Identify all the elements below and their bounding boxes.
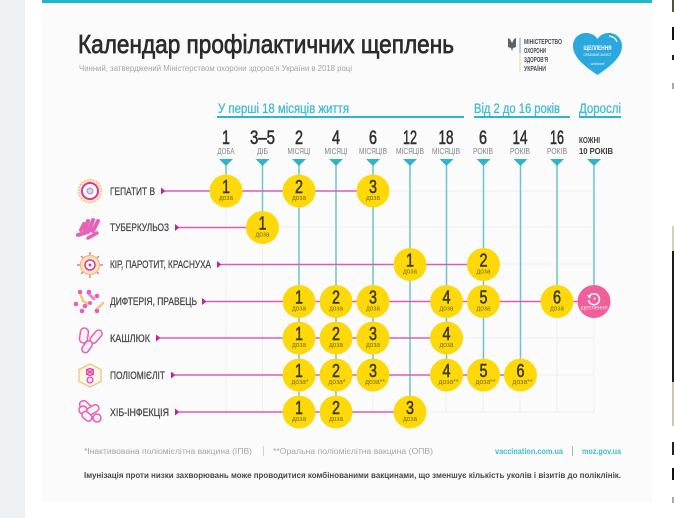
website links: vaccination.com.ua xyxy=(495,446,563,456)
icon: Hib bacteria xyxy=(78,399,101,423)
row: hepatitis B xyxy=(78,174,390,208)
row: hepatitis B: доза xyxy=(366,193,381,202)
row: diphtheria, tetanus: доза xyxy=(329,304,344,312)
icon: polio virus xyxy=(79,364,101,387)
booster badge: adults every 10 years: щеплення xyxy=(580,304,608,312)
logo: vaccination heart: unicef xyxy=(590,62,605,66)
row: diphtheria, tetanus: 3 xyxy=(369,288,377,308)
column headers: РОКІВ xyxy=(547,147,567,156)
row: diphtheria, tetanus: доза xyxy=(550,304,565,312)
row: Hib infection: 2 xyxy=(332,398,340,418)
icon: hepatitis virus xyxy=(78,180,102,202)
row: pertussis: 4 xyxy=(442,324,450,344)
column headers: 1 xyxy=(222,128,230,149)
booster badge: adults every 10 years xyxy=(578,285,610,318)
row: pertussis: доза xyxy=(366,340,381,349)
column headers: ДОБА xyxy=(218,147,235,156)
logo: ministry of health: МІНІСТЕРСТВО xyxy=(524,39,562,46)
row: measles, mumps, rubella: доза xyxy=(476,266,491,276)
title: Календар профілактичних щеплень xyxy=(78,29,454,59)
row: Hib infection: ХІБ-ІНФЕКЦІЯ xyxy=(110,407,169,419)
row: pertussis xyxy=(79,322,463,354)
column headers: МІСЯЦІВ xyxy=(432,147,460,156)
row: pertussis: доза xyxy=(292,340,307,349)
logo: vaccination heart: ЩЕПЛЕННЯ xyxy=(584,46,612,52)
column headers: 6 xyxy=(479,128,487,149)
row: tuberculosis: 1 xyxy=(258,214,266,234)
footnotes: **Оральна поліомієлітна вакцина (ОПВ) xyxy=(273,447,433,456)
row: measles, mumps, rubella: 1 xyxy=(406,250,414,270)
row: measles, mumps, rubella: КІР, ПАРОТИТ, КРАСНУХА xyxy=(110,259,211,271)
row: pertussis: КАШЛЮК xyxy=(110,333,150,345)
row: diphtheria, tetanus: 4 xyxy=(442,288,450,308)
column headers: 12 xyxy=(403,128,417,149)
row: tuberculosis: ТУБЕРКУЛЬОЗ xyxy=(110,222,169,234)
row: poliomyelitis: доза** xyxy=(365,377,385,386)
row: Hib infection xyxy=(78,396,427,428)
row: pertussis: доза xyxy=(329,340,344,349)
row: Hib infection: доза xyxy=(292,414,307,423)
row: Hib infection: 3 xyxy=(406,398,414,418)
section heading: 2 to 16 years: Від 2 до 16 років xyxy=(474,101,560,116)
row: hepatitis B: доза xyxy=(292,193,307,202)
subtitle: Чинний, затверджений Міністерством охорони здоров'я України в 2018 році xyxy=(79,64,352,73)
grid: faint row and column guides xyxy=(226,191,594,412)
row: poliomyelitis: доза* xyxy=(292,377,309,386)
section heading: adults: Дорослі xyxy=(579,101,621,116)
row: poliomyelitis: 6 xyxy=(516,361,524,381)
row: pertussis: доза xyxy=(440,340,454,349)
icon: diphtheria bacteria xyxy=(74,290,103,313)
website links: moz.gov.ua xyxy=(582,446,621,456)
row: hepatitis B: ГЕПАТИТ В xyxy=(110,186,155,198)
column headers: 6 xyxy=(369,128,377,149)
row: Hib infection: 1 xyxy=(295,398,303,418)
row: Hib infection: доза xyxy=(329,414,344,423)
logo: ministry of health: ЗДОРОВ'Я xyxy=(524,57,548,64)
footnotes: *Інактивована поліомієлітна вакцина (ІПВ) xyxy=(84,447,252,456)
row: tuberculosis xyxy=(78,211,279,244)
column headers: 14 xyxy=(512,128,528,149)
row: poliomyelitis xyxy=(79,358,537,392)
row: hepatitis B: 1 xyxy=(222,177,230,197)
column headers: МІСЯЦІ xyxy=(324,147,348,156)
icon: tuberculosis bacilli xyxy=(78,220,98,238)
row: diphtheria, tetanus: 2 xyxy=(332,288,340,308)
column headers: 18 xyxy=(438,128,454,149)
row: Hib infection: доза xyxy=(403,414,418,423)
row: diphtheria, tetanus: 1 xyxy=(295,288,303,308)
row: diphtheria, tetanus: доза xyxy=(440,304,454,312)
row: poliomyelitis: 5 xyxy=(480,361,488,381)
row: poliomyelitis: доза** xyxy=(476,377,496,386)
row: diphtheria, tetanus: 5 xyxy=(480,288,488,308)
row: poliomyelitis: 1 xyxy=(295,361,303,381)
logo: ministry of health: ОХОРОНИ xyxy=(524,48,546,55)
row: pertussis: 2 xyxy=(332,324,340,344)
row: poliomyelitis: доза* xyxy=(328,377,346,386)
column headers: 4 xyxy=(332,128,340,149)
clipped neighbouring page content at right edge xyxy=(672,0,674,503)
logo: ministry of health: УКРАЇНИ xyxy=(524,65,546,73)
row: measles, mumps, rubella: доза xyxy=(403,266,418,276)
website links xyxy=(495,446,621,456)
row: tuberculosis: доза xyxy=(256,230,270,238)
row: pertussis: 1 xyxy=(295,324,303,344)
icon: pertussis bacteria xyxy=(79,328,104,354)
row: diphtheria, tetanus: ДИФТЕРІЯ, ПРАВЕЦЬ xyxy=(110,296,197,308)
column headers: РОКІВ xyxy=(473,147,493,156)
column headers: 2 xyxy=(295,128,303,149)
column headers: МІСЯЦІВ xyxy=(359,147,387,156)
row: diphtheria, tetanus: доза xyxy=(476,304,491,312)
logo: vaccination heart: ОРАЗОВИЙ ЗАХИСТ xyxy=(584,52,612,57)
row: measles, mumps, rubella: 2 xyxy=(480,250,488,270)
row: poliomyelitis: доза** xyxy=(512,377,533,386)
column headers: ДІБ xyxy=(257,147,268,156)
icon: measles virus xyxy=(77,252,103,278)
immunization note: Імунізація проти низки захворювань може проводитися комбінованими вакцинами, що зменшує кількість уколів і візитів до поліклінік. xyxy=(84,471,621,480)
row: diphtheria, tetanus: 6 xyxy=(553,288,561,308)
logo: vaccination heart xyxy=(573,33,622,75)
row: pertussis: 3 xyxy=(369,324,377,344)
column headers: РОКІВ xyxy=(510,147,530,156)
column headers: МІСЯЦІВ xyxy=(396,147,424,156)
row: hepatitis B: доза xyxy=(219,193,234,202)
column headers: КОЖНІ xyxy=(579,135,600,145)
row: poliomyelitis: 3 xyxy=(369,361,377,381)
column headers: 16 xyxy=(550,128,564,149)
section heading: first 18 months: У перші 18 місяців життя xyxy=(218,101,349,116)
footnotes xyxy=(84,446,433,456)
column headers: МІСЯЦІ xyxy=(288,147,310,156)
row: poliomyelitis: ПОЛІОМІЄЛІТ xyxy=(110,370,165,382)
logo: ministry of health xyxy=(508,38,562,73)
row: poliomyelitis: 2 xyxy=(332,361,340,381)
column headers: 10 РОКІВ xyxy=(579,146,613,156)
row: diphtheria, tetanus xyxy=(74,285,610,318)
column headers: 3–5 xyxy=(250,128,275,149)
row: diphtheria, tetanus: доза xyxy=(292,304,307,312)
row: diphtheria, tetanus: доза xyxy=(366,304,381,312)
row: poliomyelitis: доза** xyxy=(438,377,459,386)
column headers xyxy=(218,128,613,156)
row: hepatitis B: 2 xyxy=(295,177,303,197)
row: hepatitis B: 3 xyxy=(369,177,377,197)
timeline columns: teal lines and markers xyxy=(219,159,601,412)
row: poliomyelitis: 4 xyxy=(442,361,450,381)
row: measles, mumps, rubella xyxy=(77,248,500,281)
